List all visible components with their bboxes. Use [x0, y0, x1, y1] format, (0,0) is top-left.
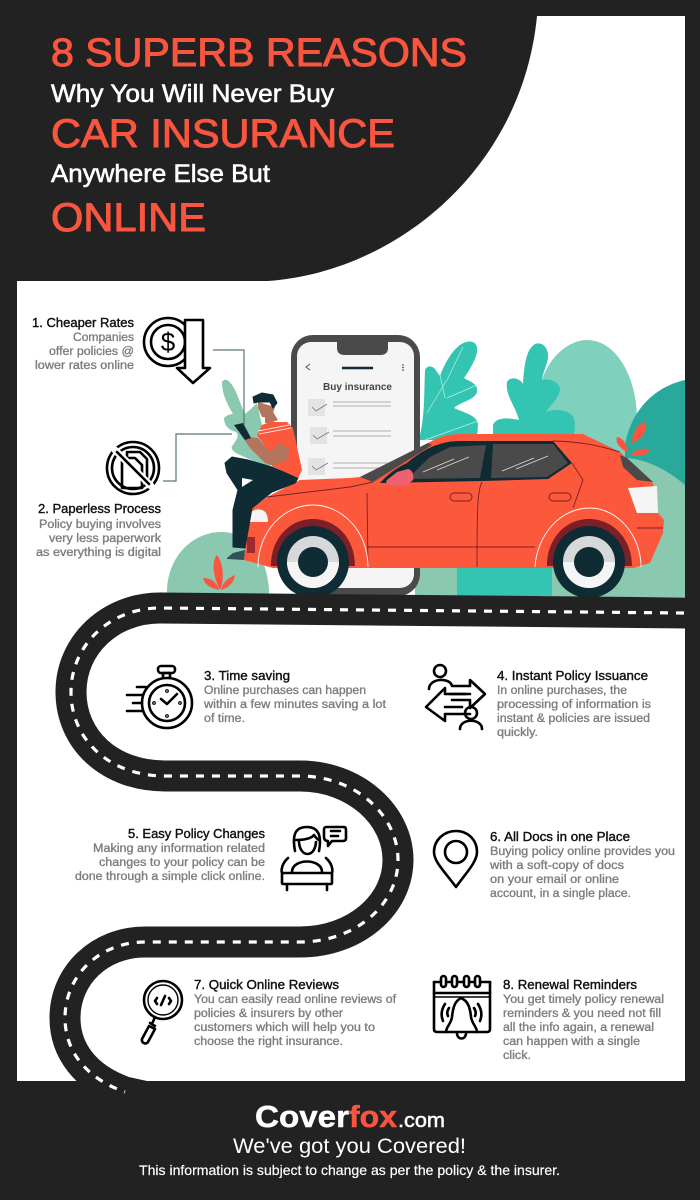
title: Why You Will Never Buy [51, 80, 335, 108]
item 2: paperless process [36, 501, 161, 559]
item 4: instant policy issuance: 4. Instant Policy Issuance [497, 668, 648, 683]
item 6: all docs in one place: Buying policy online provides you [490, 846, 675, 858]
title: 8 SUPERB REASONS [51, 31, 467, 75]
item 1: cheaper rates: offer policies @ [49, 346, 134, 358]
item 2: paperless process: 2. Paperless Process [38, 501, 161, 516]
item 3: time saving: 3. Time saving [204, 668, 290, 683]
item 5: easy policy changes: 5. Easy Policy Changes [128, 826, 265, 841]
logo: Cover [255, 1099, 349, 1134]
title: CAR INSURANCE [51, 112, 395, 156]
item 5: easy policy changes [75, 826, 265, 883]
item 4: instant policy issuance: quickly. [497, 727, 538, 739]
icon: magnifying glass [142, 981, 182, 1043]
background plants [167, 340, 685, 597]
item 4: instant policy issuance: processing of information is [497, 699, 651, 711]
item 8: renewal reminders: You get timely policy renewal [503, 994, 664, 1006]
item 1: cheaper rates: 1. Cheaper Rates [32, 315, 134, 330]
item 1: cheaper rates [32, 315, 134, 372]
title [51, 31, 467, 240]
item 6: all docs in one place [489, 829, 675, 900]
item 6: all docs in one place: with a soft-copy of docs [489, 860, 624, 872]
item 8: renewal reminders: can happen with a single [503, 1036, 640, 1048]
item 7: quick online reviews: customers which will help you to [194, 1022, 375, 1034]
item 3: time saving: Online purchases can happen [204, 685, 366, 697]
item 8: renewal reminders: 8. Renewal Reminders [503, 977, 637, 992]
icon: calendar bell [434, 976, 490, 1038]
item 7: quick online reviews [194, 977, 397, 1048]
item 2: paperless process: very less paperwork [49, 533, 161, 545]
item 2: paperless process: as everything is digital [36, 547, 161, 559]
plant: red sprout at left [203, 555, 235, 590]
item 7: quick online reviews: You can easily read online reviews of [194, 994, 397, 1006]
road [65, 608, 690, 1102]
car [244, 434, 664, 598]
tagline: We've got you Covered! [233, 1135, 466, 1158]
item 6: all docs in one place: on your email or online [490, 874, 619, 886]
item 4: instant policy issuance: In online purchases, the [497, 685, 627, 697]
phone [291, 335, 420, 596]
item 4: instant policy issuance: instant & policies are issued [497, 713, 650, 725]
connector lines [163, 350, 244, 481]
icon: stopwatch [127, 666, 192, 728]
item 8: renewal reminders: click. [503, 1050, 531, 1062]
man sitting on car [225, 393, 302, 560]
item 3: time saving [203, 668, 387, 725]
logo [255, 1099, 445, 1134]
plant: red sprout by rear of car [616, 422, 650, 456]
disclaimer: This information is subject to change as per the policy & the insurer. [139, 1162, 560, 1178]
item 4: instant policy issuance [497, 668, 651, 739]
phone: Buy insurance [323, 381, 392, 393]
logo: fox [349, 1099, 398, 1134]
item 7: quick online reviews: choose the right insurance. [194, 1036, 343, 1048]
item 6: all docs in one place: account, in a single place. [490, 888, 631, 900]
title: Anywhere Else But [51, 160, 270, 188]
item 8: renewal reminders: all the info again, a renewal [503, 1022, 654, 1034]
item 7: quick online reviews: policies & insurers by other [194, 1008, 343, 1020]
icon: map pin [434, 831, 477, 887]
item 3: time saving: of time. [204, 713, 245, 725]
item 8: renewal reminders [503, 977, 664, 1062]
logo: .com [398, 1110, 445, 1132]
item 5: easy policy changes: Making any information related [93, 843, 265, 855]
icon: people exchanging arrows [426, 665, 485, 729]
icon: no paper [107, 442, 159, 494]
item 3: time saving: within a few minutes saving a lot [203, 699, 387, 711]
item 6: all docs in one place: 6. All Docs in one Place [490, 829, 630, 844]
item 1: cheaper rates: Companies [73, 332, 134, 344]
item 2: paperless process: Policy buying involves [39, 519, 161, 531]
icon: coin with down arrow: $ [161, 327, 176, 357]
item 5: easy policy changes: changes to your policy can be [99, 857, 265, 869]
icon: person with speech bubble [282, 827, 346, 890]
title: ONLINE [51, 196, 206, 240]
item 7: quick online reviews: 7. Quick Online Reviews [194, 977, 339, 992]
item 1: cheaper rates: lower rates online [35, 360, 134, 372]
item 8: renewal reminders: reminders & you need not fill [503, 1008, 661, 1020]
item 5: easy policy changes: done through a simple click online. [75, 871, 265, 883]
icon: coin with down arrow [144, 318, 210, 383]
